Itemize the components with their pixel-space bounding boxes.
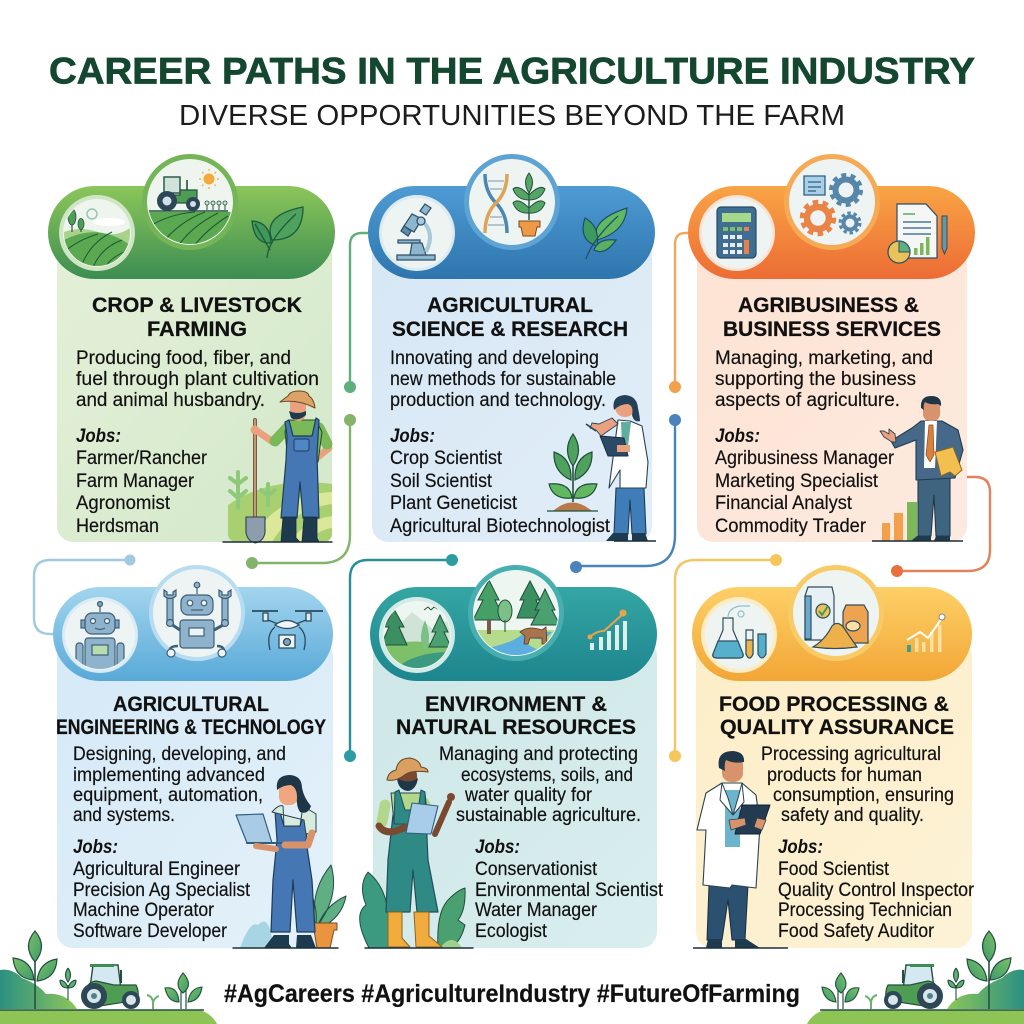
connector: orange (669, 233, 688, 393)
icon: drone (252, 611, 323, 650)
panel body (57, 640, 333, 948)
icon: leaves (252, 207, 303, 258)
panel: agribusiness and business services (688, 154, 975, 542)
heading (92, 294, 302, 341)
panel: agricultural science and research (368, 154, 656, 542)
description: Designing, developing, and (73, 744, 286, 765)
description: new methods for sustainable (390, 369, 616, 390)
description: implementing advanced (73, 765, 265, 786)
description: Managing and protecting (439, 744, 638, 765)
jobs list: Soil Scientist (390, 471, 493, 492)
description (715, 348, 933, 411)
jobs list: Water Manager (475, 900, 598, 921)
jobs list: Jobs: (73, 837, 118, 858)
heading: AGRICULTURAL (427, 294, 593, 317)
connector: yellow (669, 554, 782, 762)
icon: growth chart (588, 610, 627, 650)
panel body (57, 240, 332, 542)
jobs list: Crop Scientist (390, 448, 503, 469)
figure: food scientist (693, 751, 788, 948)
description: equipment, automation, (73, 785, 263, 806)
description: safety and quality. (781, 805, 924, 826)
heading: CROP & LIVESTOCK (92, 294, 302, 317)
header band (688, 154, 975, 279)
jobs list: Jobs: (390, 426, 435, 447)
subtitle: DIVERSE OPPORTUNITIES BEYOND THE FARM (179, 100, 845, 132)
figure: scientist (586, 395, 656, 541)
header band (370, 565, 657, 681)
header band (48, 154, 335, 279)
heading: AGRIBUSINESS & (738, 294, 919, 317)
description: Managing, marketing, and (715, 348, 933, 369)
panel: food processing and quality assurance (692, 565, 975, 948)
figure: farmer with shovel (223, 391, 332, 543)
jobs list: Software Developer (73, 921, 228, 942)
jobs list: Precision Ag Specialist (73, 880, 251, 901)
connector: lime to row two (246, 414, 356, 569)
jobs list (73, 837, 251, 942)
jobs list (715, 426, 895, 537)
header band (368, 154, 655, 279)
icon: forest landscape (381, 607, 451, 670)
figure: technician with laptop (233, 775, 346, 948)
jobs list: Conservationist (475, 859, 598, 880)
heading (396, 693, 636, 739)
description: Innovating and developing (390, 348, 599, 369)
title: CAREER PATHS IN THE AGRICULTURE INDUSTRY (49, 50, 975, 92)
jobs list: Agribusiness Manager (715, 448, 895, 469)
heading (719, 693, 954, 739)
heading: NATURAL RESOURCES (396, 716, 636, 739)
panel: agricultural engineering and technology (53, 565, 346, 948)
header band (692, 565, 972, 681)
heading (723, 294, 941, 341)
jobs list: Financial Analyst (715, 493, 853, 514)
description (76, 348, 319, 411)
jobs list: Food Safety Auditor (778, 921, 935, 942)
panel body (372, 240, 652, 542)
description: consumption, ensuring (773, 785, 954, 806)
figure: growth bars (882, 502, 917, 541)
panel body (373, 640, 657, 948)
icon: tractor in field (146, 169, 232, 246)
figure: businessman (872, 396, 963, 541)
description: fuel through plant cultivation (76, 369, 319, 390)
icon: river and trees (474, 580, 558, 655)
jobs list: Jobs: (475, 837, 520, 858)
jobs list (475, 837, 664, 942)
heading: BUSINESS SERVICES (723, 318, 941, 341)
jobs list: Agricultural Biotechnologist (390, 516, 611, 537)
icon: robot with wrenches (164, 582, 231, 657)
description: Producing food, fiber, and (76, 348, 291, 369)
heading: ENGINEERING & TECHNOLOGY (56, 716, 326, 739)
decoration: farm border left (0, 931, 217, 1024)
icon: calculator (717, 207, 756, 258)
icon: microscope (397, 204, 435, 260)
jobs list: Jobs: (76, 426, 121, 447)
jobs list: Environmental Scientist (475, 880, 664, 901)
jobs list: Farm Manager (76, 471, 195, 492)
jobs list (390, 426, 611, 537)
description: Processing agricultural (761, 744, 941, 765)
jobs list: Machine Operator (73, 900, 215, 921)
description: ecosystems, soils, and (461, 765, 633, 786)
description: and animal husbandry. (76, 390, 265, 411)
hashtags: #AgCareers #AgricultureIndustry #FutureOfFarming (224, 980, 800, 1008)
heading: FOOD PROCESSING & (719, 693, 949, 716)
jobs list: Agronomist (76, 493, 171, 514)
heading (392, 294, 628, 341)
jobs list: Herdsman (76, 516, 159, 537)
description: sustainable agriculture. (456, 805, 641, 826)
jobs list (76, 426, 208, 537)
panel body (697, 240, 967, 542)
description: production and technology. (390, 390, 606, 411)
heading: SCIENCE & RESEARCH (392, 318, 628, 341)
description (73, 744, 286, 826)
figure: seedling (547, 434, 598, 511)
jobs list: Quality Control Inspector (778, 880, 975, 901)
jobs list: Marketing Specialist (715, 471, 879, 492)
description: water quality for (464, 785, 593, 806)
jobs list: Ecologist (475, 921, 548, 942)
connector: red-orange (891, 477, 990, 577)
heading: QUALITY ASSURANCE (720, 716, 954, 739)
jobs list: Farmer/Rancher (76, 448, 208, 469)
jobs list: Commodity Trader (715, 516, 867, 537)
panel: environment and natural resources (360, 565, 664, 948)
description (390, 348, 616, 411)
jobs list: Jobs: (715, 426, 760, 447)
connector: light blue (34, 554, 136, 634)
jobs list: Food Scientist (778, 859, 890, 880)
heading: AGRICULTURAL (113, 693, 269, 716)
heading: ENVIRONMENT & (425, 693, 607, 716)
heading: FARMING (147, 318, 247, 341)
connector: blue (570, 414, 681, 573)
icon: document and gears (802, 175, 861, 234)
description: supporting the business (715, 369, 916, 390)
jobs list: Processing Technician (778, 900, 952, 921)
connector: teal (344, 554, 458, 762)
figure: conservationist (360, 758, 473, 948)
description (761, 744, 954, 826)
panel: crop and livestock farming (48, 154, 335, 543)
heading (56, 693, 326, 739)
icon: report with chart (888, 204, 947, 263)
icon: rolling fields (64, 209, 131, 270)
connector: green top-left (344, 233, 368, 393)
description: aspects of agriculture. (715, 390, 900, 411)
icon: faint growth chart (907, 614, 945, 652)
jobs list: Agricultural Engineer (73, 859, 241, 880)
panel body (696, 640, 972, 948)
description: and systems. (73, 805, 175, 826)
jobs list (778, 837, 975, 942)
icon: robot (76, 602, 124, 670)
header band (53, 565, 333, 681)
icon: lab flask and tubes (713, 606, 766, 658)
decoration: farm border right (807, 931, 1024, 1024)
icon: dna and potted plant (485, 173, 545, 236)
icon: leaf sprig (583, 208, 627, 259)
description (439, 744, 641, 826)
jobs list: Plant Geneticist (390, 493, 518, 514)
description: products for human (767, 765, 922, 786)
jobs list: Jobs: (778, 837, 823, 858)
icon: food packages and grain pile (805, 587, 868, 648)
